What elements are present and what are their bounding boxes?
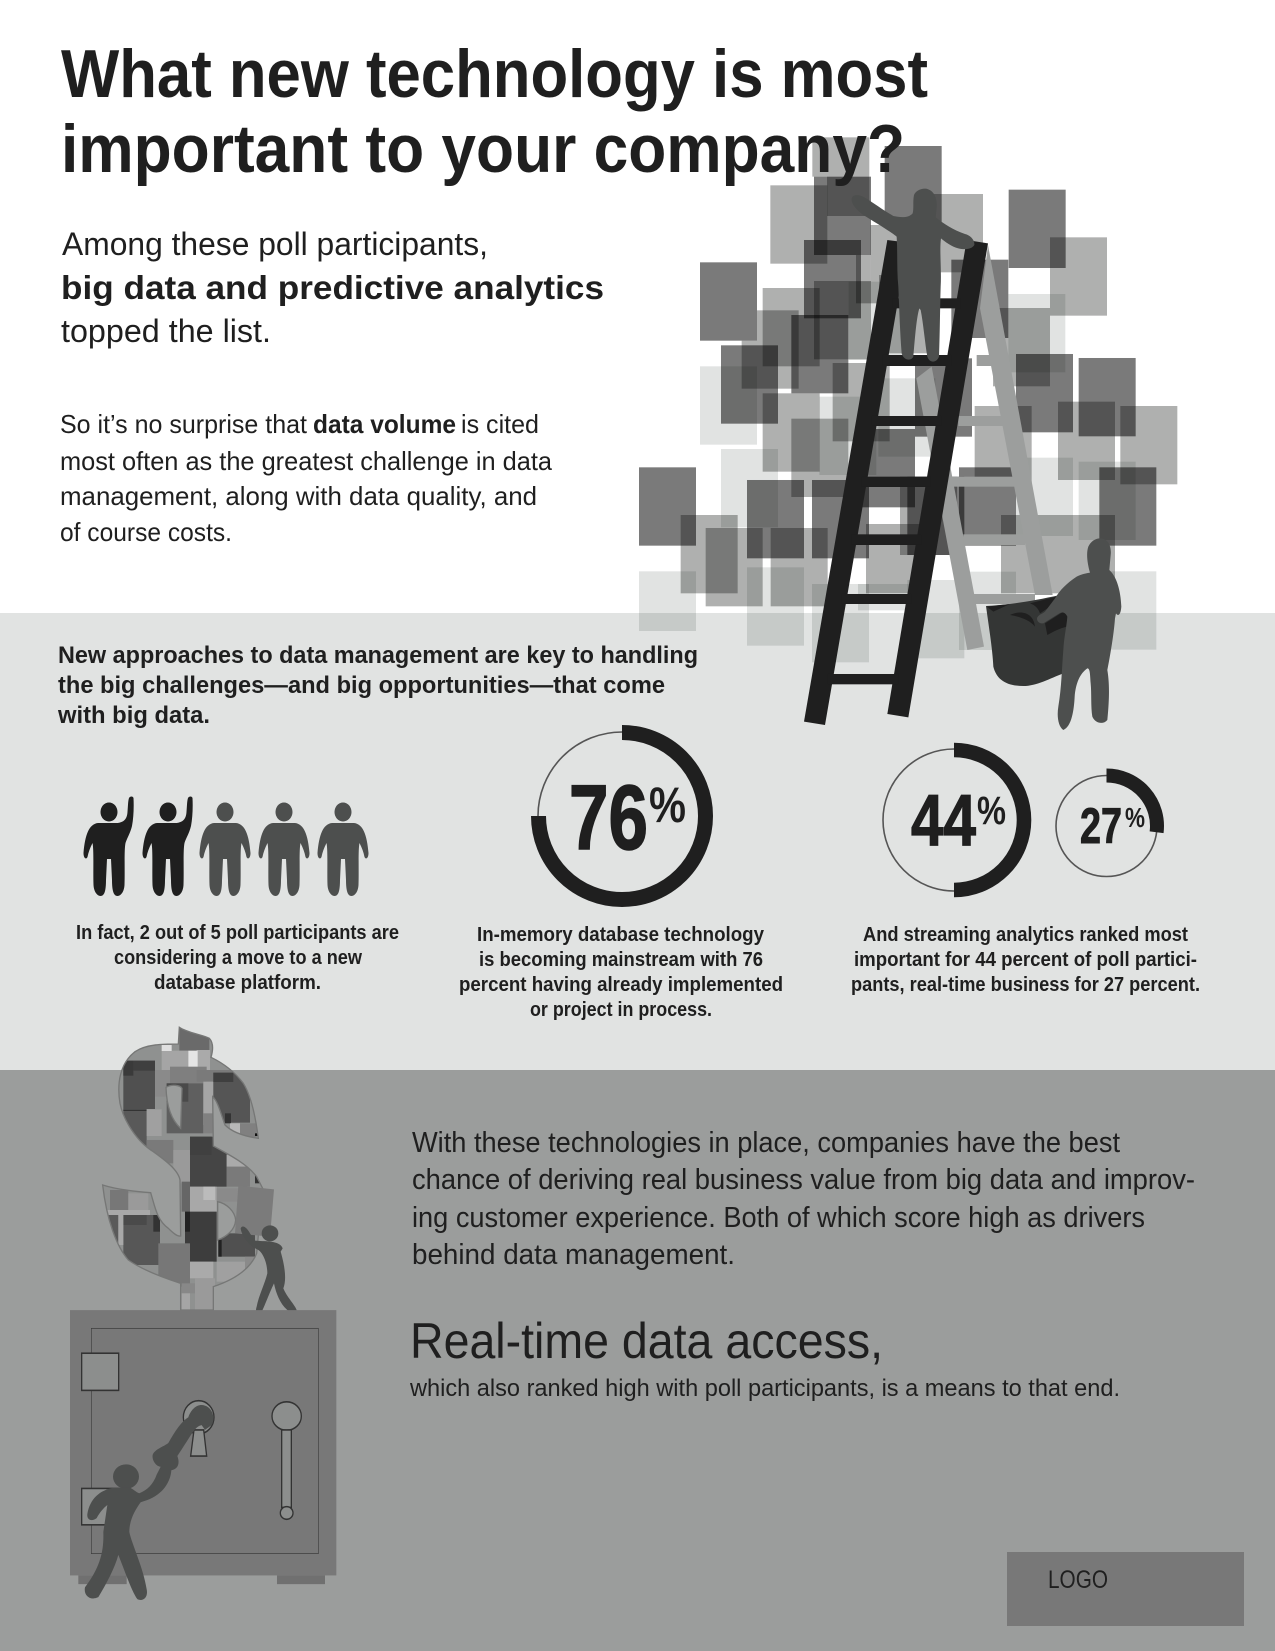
dollar sign mosaic bbox=[100, 1025, 267, 1312]
text block: data volume: So it’s no surprise that bbox=[60, 409, 308, 439]
person pushing tile bbox=[241, 1225, 297, 1314]
illustration: data blocks and ladder bbox=[639, 137, 1177, 730]
heading: real-time data access: Real-time data access, bbox=[410, 1313, 883, 1369]
title: important to your company? bbox=[61, 111, 905, 187]
panel: dark grey value band bbox=[0, 1070, 1275, 1651]
chart: 44 percent ring bbox=[883, 749, 1025, 891]
text block: business value: With these technologies in place, companies have the best bbox=[412, 1127, 1120, 1159]
text block: data volume: of course costs. bbox=[60, 517, 232, 547]
illustration: safe bbox=[70, 1310, 336, 1600]
caption: streaming analytics: important for 44 percent of poll partici- bbox=[854, 948, 1197, 971]
mid grey data blocks bbox=[681, 137, 1177, 606]
chart: 27 percent ring bbox=[1056, 776, 1157, 876]
chart: 44 percent ring: 44 bbox=[911, 781, 976, 861]
light data blocks bbox=[639, 282, 1156, 662]
caption: in-memory database bbox=[459, 923, 783, 1021]
caption: streaming analytics: And streaming analytics ranked most bbox=[863, 923, 1188, 946]
heading: new approaches: New approaches to data management are key to handling bbox=[58, 642, 698, 669]
chart: 76 percent ring bbox=[538, 732, 706, 900]
subheading bbox=[61, 226, 604, 349]
chart: 44 percent ring: % bbox=[977, 789, 1006, 833]
text block: data volume: is cited bbox=[461, 409, 539, 439]
caption: streaming analytics bbox=[851, 923, 1200, 996]
caption: 2 out of 5: In fact, 2 out of 5 poll participants are bbox=[76, 921, 399, 944]
title bbox=[61, 36, 928, 187]
dark data blocks bbox=[639, 146, 1156, 558]
caption: in-memory database: In-memory database technology bbox=[477, 923, 765, 946]
text: real-time explanation: which also ranked high with poll participants, is a means to that end. bbox=[409, 1375, 1120, 1402]
icon: person raising hand 1 bbox=[84, 796, 134, 896]
chart: 27 percent ring: 27 bbox=[1080, 798, 1122, 854]
heading: new approaches bbox=[57, 642, 698, 729]
title: What new technology is most bbox=[61, 36, 928, 112]
front ladder bbox=[804, 240, 988, 725]
text block: data volume bbox=[60, 409, 553, 547]
person reaching keyhole bbox=[85, 1405, 213, 1600]
subheading: big data and predictive analytics bbox=[61, 269, 604, 306]
icon: person 4 bbox=[258, 802, 310, 896]
caption: in-memory database: or project in process. bbox=[530, 998, 712, 1021]
caption: in-memory database: percent having already implemented bbox=[459, 973, 783, 996]
heading: new approaches: with big data. bbox=[57, 702, 210, 729]
caption: streaming analytics: pants, real-time business for 27 percent. bbox=[851, 973, 1200, 996]
data tile held by person bbox=[235, 1186, 274, 1237]
logo placeholder bbox=[1007, 1552, 1244, 1626]
heading: new approaches: the big challenges—and big opportunities—that come bbox=[58, 672, 665, 699]
safe body bbox=[70, 1310, 336, 1584]
caption: 2 out of 5 bbox=[76, 921, 399, 994]
icon: person raising hand 2 bbox=[142, 796, 193, 896]
text block: business value: ing customer experience. Both of which score high as drivers bbox=[412, 1202, 1145, 1234]
text block: business value: behind data management. bbox=[412, 1239, 735, 1271]
chart: 76 percent ring: 76 bbox=[569, 767, 648, 869]
panel: white header background bbox=[0, 0, 1275, 613]
icon row: five people, two raising hands bbox=[84, 796, 368, 896]
caption: 2 out of 5: database platform. bbox=[154, 971, 321, 994]
logo placeholder: LOGO bbox=[1048, 1566, 1108, 1594]
text block: data volume: management, along with data quality, and bbox=[60, 481, 537, 511]
subheading: topped the list. bbox=[61, 313, 271, 349]
icon: person 3 bbox=[200, 802, 250, 896]
chart: 27 percent ring: % bbox=[1125, 802, 1145, 833]
panel: light grey statistics band bbox=[0, 613, 1275, 1070]
illustration: dollar sign on safe bbox=[100, 1025, 297, 1314]
rear ladder bbox=[916, 245, 1053, 650]
person on ladder bbox=[852, 189, 974, 362]
text block: business value: chance of deriving real business value from big data and improv- bbox=[412, 1164, 1195, 1196]
subheading: Among these poll participants, bbox=[62, 226, 488, 262]
bag of data bbox=[986, 595, 1068, 686]
text block: business value bbox=[412, 1127, 1195, 1271]
person holding bag bbox=[1037, 538, 1121, 730]
caption: in-memory database: is becoming mainstream with 76 bbox=[479, 948, 763, 971]
text block: data volume: data volume bbox=[313, 409, 456, 439]
caption: 2 out of 5: considering a move to a new bbox=[114, 946, 362, 969]
icon: person 5 bbox=[318, 802, 368, 896]
text block: data volume: most often as the greatest challenge in data bbox=[60, 446, 553, 476]
chart: 76 percent ring: % bbox=[649, 777, 686, 833]
